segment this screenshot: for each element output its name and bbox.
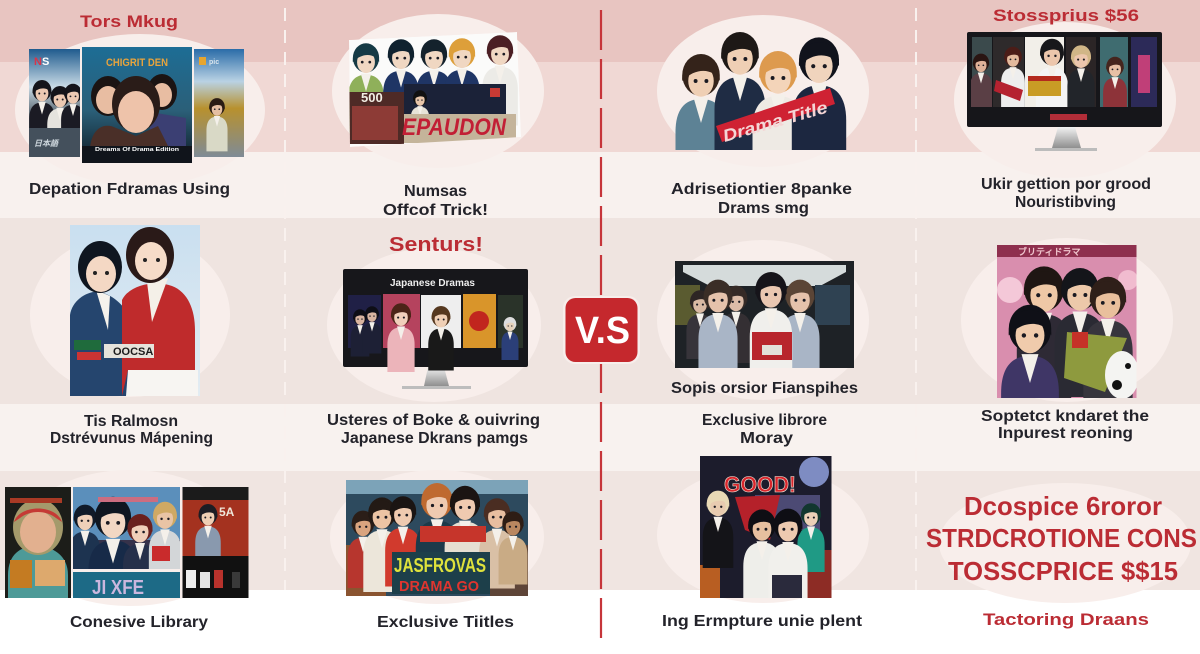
VS badge — [563, 296, 640, 364]
heading: Tors Mkug — [80, 12, 178, 31]
kimono couple poster: OOCSA — [113, 346, 153, 358]
caption — [50, 413, 213, 447]
panel: row 3 column 3 — [662, 456, 863, 630]
monitor with posters — [343, 269, 528, 389]
posters trio: 日本語 — [34, 139, 60, 148]
panel: row 3 column 2 — [346, 480, 528, 631]
panel: row 2 column 4 — [981, 245, 1149, 451]
caption: Numsas — [404, 183, 467, 200]
manga collage: 500 — [361, 90, 383, 105]
comic cover — [346, 480, 528, 596]
caption: Moray — [740, 430, 793, 447]
poster collage: 5A — [219, 505, 235, 519]
posters trio: NS — [34, 56, 49, 68]
panel: row 1 column 2 — [348, 32, 521, 219]
caption — [981, 176, 1151, 211]
panel: row 1 column 3 — [671, 32, 852, 217]
price headline: TOSSCPRICE $$15 — [948, 556, 1178, 586]
cherry blossom poster — [997, 245, 1136, 398]
movie poster — [700, 456, 832, 608]
heading: Stossprius $56 — [993, 6, 1139, 25]
manga collage: EPAUDON — [402, 114, 507, 141]
panel: row 2 column 2 — [327, 234, 540, 447]
anime group: Drama Title — [721, 98, 830, 146]
poster collage — [5, 487, 248, 598]
panel: row 1 column 1 — [29, 12, 244, 198]
caption: Offcof Trick! — [383, 202, 488, 219]
monitor with posters: Japanese Dramas — [390, 278, 475, 289]
panel: row 3 column 4 — [926, 491, 1197, 629]
centre dashed divider — [600, 10, 602, 646]
kimono couple poster — [70, 225, 200, 396]
movie poster: GOOD! — [724, 472, 796, 497]
caption: Adrisetiontier 8panke — [671, 181, 852, 198]
panel: row 1 column 4 — [967, 6, 1162, 211]
VS badge: V.S — [575, 310, 630, 352]
poster collage: JI XFE — [92, 577, 144, 599]
caption: Exclusive librore — [702, 412, 827, 429]
caption: Ukir gettion por grood — [981, 176, 1151, 193]
caption — [327, 412, 540, 447]
comic cover: JASFROVAS — [394, 555, 486, 577]
caption — [383, 183, 488, 219]
panel: row 2 column 3 — [671, 261, 858, 447]
caption — [981, 408, 1149, 442]
caption — [671, 181, 852, 217]
posters trio — [29, 47, 244, 163]
caption: Soptetct kndaret the — [981, 408, 1149, 425]
posters trio: pic — [209, 59, 219, 66]
anime group — [676, 32, 846, 150]
panel: row 3 column 1 — [5, 487, 248, 631]
caption: Drams smg — [718, 200, 809, 217]
posters trio: Dreams Of Drama Edition — [95, 147, 179, 153]
caption: Conesive Library — [70, 614, 208, 631]
caption: Japanese Dkrans pamgs — [341, 430, 528, 447]
cherry blossom poster: ブリティドラマ — [1018, 246, 1080, 257]
caption: Nouristibving — [1015, 194, 1116, 211]
caption: Tactoring Draans — [983, 610, 1149, 629]
caption: Exclusive Tiitles — [377, 614, 514, 631]
monitor with posters — [967, 32, 1162, 151]
price headline — [926, 491, 1197, 586]
posters trio: CHIGRIT DEN — [106, 57, 168, 69]
panel: row 2 column 1 — [50, 225, 213, 447]
caption: Ing Ermpture unie plent — [662, 613, 863, 630]
price headline: Dcospice 6roror — [964, 491, 1162, 521]
kimono group poster — [675, 261, 854, 380]
caption: Sopis orsior Fianspihes — [671, 380, 858, 397]
caption: Tis Ralmosn — [84, 413, 178, 430]
caption: Dstrévunus Mápening — [50, 430, 213, 447]
comic cover: DRAMA GO — [399, 578, 479, 595]
heading: Senturs! — [389, 234, 483, 256]
manga collage — [348, 32, 521, 147]
caption — [671, 380, 858, 447]
caption: Usteres of Boke & ouivring — [327, 412, 540, 429]
caption: Inpurest reoning — [998, 425, 1133, 442]
caption: Depation Fdramas Using — [29, 181, 230, 198]
